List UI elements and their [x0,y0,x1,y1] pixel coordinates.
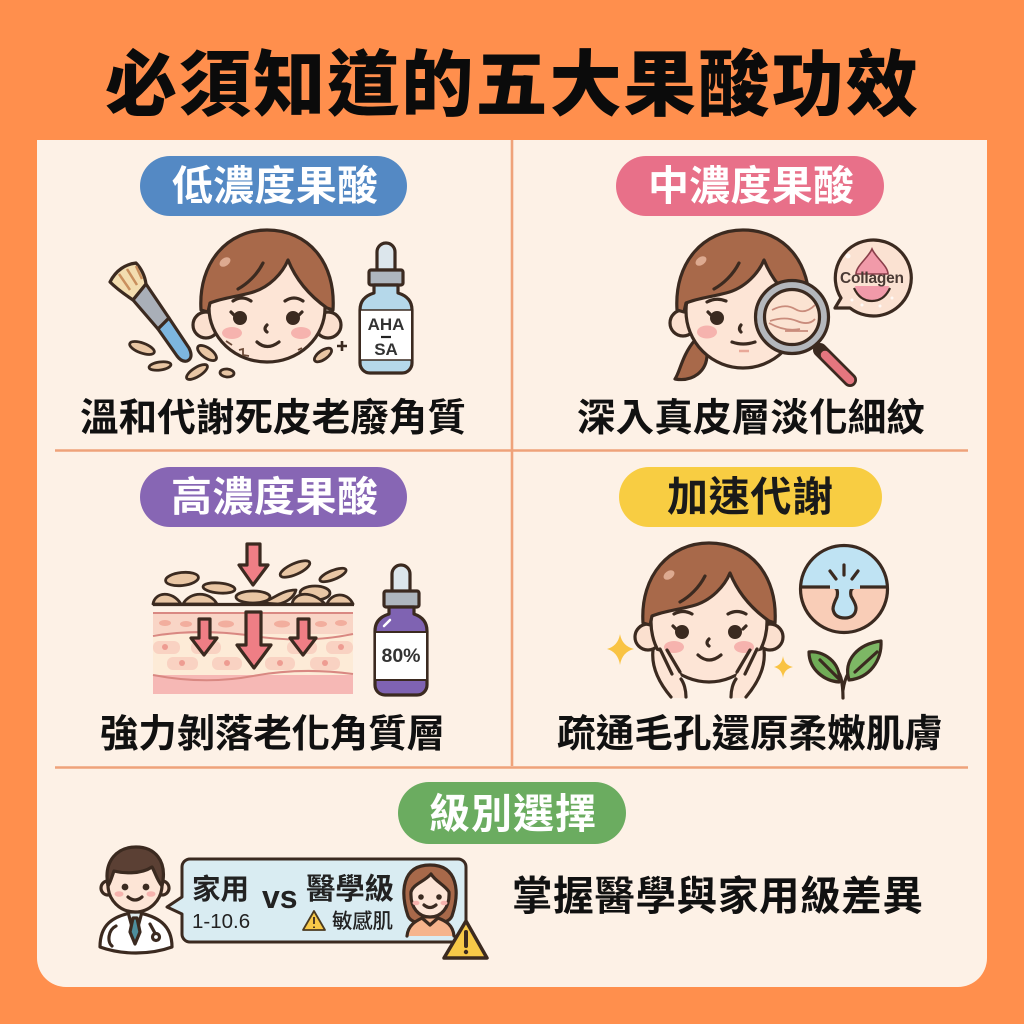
label: home grade: 家用 [192,874,249,906]
heading pill: medium concentration: 中濃度果酸 [648,163,854,209]
label: pH range: 1-10.6 [192,910,250,933]
label: sensitive skin: 敏感肌 [332,910,393,933]
icon: 80% purple bottle [375,565,427,695]
main cream panel [37,140,987,987]
heading pill: low concentration: 低濃度果酸 [172,163,378,209]
icon: sparkles [607,634,793,678]
heading pill: medium concentration [616,156,884,216]
panel: medium concentration [577,156,925,440]
heading pill: accelerate metabolism [619,467,882,527]
chart: skin layer cross-section [153,612,353,694]
caption: grade selection: 掌握醫學與家用級差異 [512,873,923,919]
icon: collagen speech bubble: Collagen [840,270,904,287]
arrow: left down arrow [191,619,217,655]
icon: doctor [100,847,172,953]
icon: large warning triangle [444,921,487,958]
icon: 80% purple bottle: 80% [381,645,421,667]
icon: small warning [303,911,325,930]
panel: accelerate metabolism [557,467,943,756]
caption: high concentration: 強力剝落老化角質層 [100,713,445,756]
icon: smiling face with hands [635,543,783,698]
panel: low concentration [80,156,466,440]
label: medical grade: 醫學級 [306,873,394,906]
icon: AHA SA serum bottle: SA [374,340,398,359]
heading pill: high concentration: 高濃度果酸 [171,474,378,520]
title: 必須知道的五大果酸功效 [105,46,918,126]
arrow: right down arrow [290,619,316,655]
heading pill: high concentration [140,467,407,527]
icon: green sprout [809,641,881,698]
icon: AHA SA serum bottle [360,243,412,373]
icon: woman with ponytail [670,230,809,380]
icon: skin flakes [128,339,347,382]
heading pill: low concentration [140,156,407,216]
icon: clean pore circle [800,546,888,632]
icon: face with rough skin [193,230,341,362]
icon: woman portrait [404,865,456,936]
label: vs: vs [262,879,298,915]
heading pill: accelerate metabolism: 加速代謝 [667,474,833,520]
panel: grade selection [100,782,923,958]
caption: low concentration: 溫和代謝死皮老廢角質 [80,397,466,440]
icon: dead skin flakes [153,557,354,604]
arrow: top down arrow [239,544,268,585]
icon: magnifier on wrinkles [756,280,850,380]
icon: collagen speech bubble [835,240,911,316]
caption: medium concentration: 深入真皮層淡化細紋 [577,397,925,440]
arrow: central down arrow [237,612,271,668]
heading pill: grade selection [398,782,626,844]
heading pill: grade selection: 級別選擇 [429,791,596,837]
panel: high concentration [100,467,445,756]
icon: AHA SA serum bottle: AHA [368,315,404,334]
icon: makeup brush [110,263,191,361]
caption: accelerate metabolism: 疏通毛孔還原柔嫩肌膚 [557,713,943,756]
comparison speech bubble [167,859,466,942]
